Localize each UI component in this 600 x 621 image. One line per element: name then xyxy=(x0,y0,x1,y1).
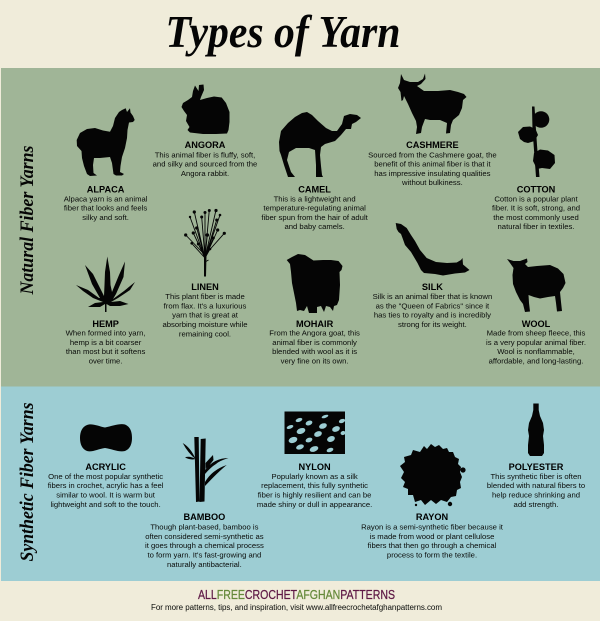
title: Types of Yarn xyxy=(166,7,400,57)
description: cotton: natural fiber in textiles. xyxy=(498,222,574,231)
heading: synthetic fiber yarns: Synthetic Fiber Yarns xyxy=(17,402,38,562)
label: nylon: NYLON xyxy=(299,462,331,472)
description: acrylic: fibers in crochet, acrylic has a feel xyxy=(48,481,164,490)
icon: flax plant xyxy=(184,209,226,276)
label: rayon: RAYON xyxy=(416,512,449,522)
description: mohair: From the Angora goat, this xyxy=(269,329,360,338)
description: mohair: blended with wool as it is xyxy=(272,347,357,356)
icon: camel xyxy=(279,112,361,177)
description: wool: is a very popular animal fiber. xyxy=(486,338,586,347)
label: bamboo: BAMBOO xyxy=(183,512,225,522)
icon: alpaca xyxy=(77,108,135,176)
description: wool: Wool is nonflammable, xyxy=(497,347,575,356)
description: silk: as the "Queen of Fabrics" since it xyxy=(376,301,490,310)
logo: allfreecrochetafghanpatterns: ALLFREECROCHETAFGHANPATTERNS xyxy=(198,588,395,602)
item: mohair xyxy=(269,254,360,366)
description: cashmere: without bulkiness. xyxy=(401,178,463,187)
description: alpaca: silky and soft. xyxy=(82,213,129,222)
description: camel: temperature-regulating animal xyxy=(263,204,366,213)
description: bamboo: Though plant-based, bamboo is xyxy=(150,523,259,532)
icon: mohair goat xyxy=(287,254,342,313)
description: bamboo: to form yarn. It's fast-growing and xyxy=(147,550,261,560)
icon: sheep xyxy=(507,258,566,312)
panel: synthetic fiber yarns xyxy=(1,386,600,581)
label: camel: CAMEL xyxy=(298,184,331,194)
description: linen: This plant fiber is made xyxy=(165,292,245,301)
description: mohair: very fine on its own. xyxy=(281,356,349,366)
footer tagline: For more patterns, tips, and inspiration, visit www.allfreecrochetafghanpatterns.com xyxy=(151,603,442,612)
icon: cotton plant xyxy=(518,106,555,177)
icon: nylon mesh xyxy=(284,412,346,454)
description: hemp: over time. xyxy=(89,356,122,366)
label: acrylic: ACRYLIC xyxy=(85,462,126,472)
item: cashmere xyxy=(368,74,497,187)
label: cashmere: CASHMERE xyxy=(406,140,459,150)
label: cotton: COTTON xyxy=(517,184,556,194)
item: hemp xyxy=(66,256,146,366)
description: rayon: fibers that then go through a chemical xyxy=(368,541,497,550)
item: camel xyxy=(261,112,369,231)
description: hemp: hemp is a bit coarser xyxy=(70,338,142,347)
description: linen: from flax. It's a luxurious xyxy=(164,301,246,310)
icon: bamboo xyxy=(183,437,228,502)
description: wool: affordable, and long-lasting. xyxy=(489,356,583,366)
description: acrylic: similar to wool. It is warm but xyxy=(56,490,156,500)
description: rayon: process to form the textile. xyxy=(387,550,477,560)
description: nylon: fiber is highly resilient and can be xyxy=(258,490,371,500)
description: silk: strong for its weight. xyxy=(398,320,467,329)
label: polyester: POLYESTER xyxy=(509,462,564,472)
description: bamboo: often considered semi-synthetic as xyxy=(145,532,264,541)
description: polyester: help reduce shrinking and xyxy=(492,490,580,500)
label: silk: SILK xyxy=(422,282,443,292)
description: cashmere: benefit of this animal fiber is that it xyxy=(374,160,491,169)
description: mohair: animal fiber is commonly xyxy=(272,338,357,347)
icon: silkworm xyxy=(396,223,470,276)
icon: goat xyxy=(398,74,466,134)
description: wool: Made from sheep fleece, this xyxy=(487,329,586,338)
description: acrylic: One of the most popular synthetic xyxy=(48,472,163,481)
description: rayon: Rayon is a semi-synthetic fiber because it xyxy=(361,523,504,532)
description: polyester: add strength. xyxy=(514,500,558,509)
panel: natural fiber yarns xyxy=(1,68,600,386)
label: angora: ANGORA xyxy=(185,140,226,150)
description: camel: and baby camels. xyxy=(284,222,345,231)
item: wool xyxy=(486,258,586,366)
item: angora xyxy=(153,84,257,178)
description: hemp: than most but it softens xyxy=(66,347,145,356)
footer xyxy=(151,588,442,612)
item: cotton xyxy=(492,106,580,231)
label: linen: LINEN xyxy=(191,282,219,292)
item: polyester xyxy=(487,404,585,509)
description: alpaca: fiber that looks and feels xyxy=(64,204,147,213)
icon: plastic bottle xyxy=(528,404,544,456)
description: polyester: This synthetic fiber is often xyxy=(490,472,582,481)
description: angora: Angora rabbit. xyxy=(181,169,229,178)
description: camel: This is a lightweight and xyxy=(274,194,356,203)
description: linen: remaining cool. xyxy=(179,329,231,338)
description: cotton: fiber. It is soft, strong, and xyxy=(492,204,580,213)
description: silk: Silk is an animal fiber that is known xyxy=(373,292,492,301)
description: rayon: is made from wood or plant cellulose xyxy=(370,532,494,541)
item: linen xyxy=(162,209,248,338)
label: alpaca: ALPACA xyxy=(87,184,125,194)
item: rayon xyxy=(361,444,504,560)
description: nylon: Popularly known as a silk xyxy=(271,472,358,481)
description: cashmere: has impressive insulating qualities xyxy=(374,169,491,178)
description: camel: fiber spun from the hair of adult xyxy=(261,213,369,222)
item: alpaca xyxy=(64,108,148,222)
icon: rayon fiber tuft xyxy=(400,444,466,506)
description: nylon: replacement, this fully synthetic xyxy=(261,481,368,490)
description: nylon: made shiny or dull in appearance. xyxy=(257,500,372,509)
description: cotton: the most commonly used xyxy=(493,213,579,222)
icon: rabbit xyxy=(182,84,230,134)
description: angora: and silky and sourced from the xyxy=(153,160,257,169)
item: silk xyxy=(373,223,492,329)
label: hemp: HEMP xyxy=(92,319,119,329)
heading: natural fiber yarns: Natural Fiber Yarns xyxy=(17,145,38,295)
description: polyester: blended with natural fibers to xyxy=(487,481,585,490)
item: acrylic xyxy=(48,424,164,509)
label: wool: WOOL xyxy=(522,319,551,329)
description: angora: This animal fiber is fluffy, soft, xyxy=(155,150,255,159)
icon: acrylic skein xyxy=(80,424,132,451)
description: linen: absorbing moisture while xyxy=(162,320,248,329)
description: linen: yarn that is great at xyxy=(172,311,239,320)
item: nylon xyxy=(257,412,372,509)
description: cashmere: Sourced from the Cashmere goat, the xyxy=(368,150,497,159)
description: bamboo: naturally antibacterial. xyxy=(167,560,242,569)
label: mohair: MOHAIR xyxy=(296,319,334,329)
icon: hemp leaf xyxy=(76,256,135,312)
description: bamboo: it goes through a chemical process xyxy=(145,541,264,550)
description: cotton: Cotton is a popular plant xyxy=(494,194,579,203)
item: bamboo xyxy=(145,437,264,569)
description: silk: has ties to royalty and is incredibly xyxy=(374,311,491,320)
description: acrylic: lightweight and soft to the touch. xyxy=(50,500,161,509)
description: alpaca: Alpaca yarn is an animal xyxy=(64,194,148,203)
description: hemp: When formed into yarn, xyxy=(66,329,146,338)
